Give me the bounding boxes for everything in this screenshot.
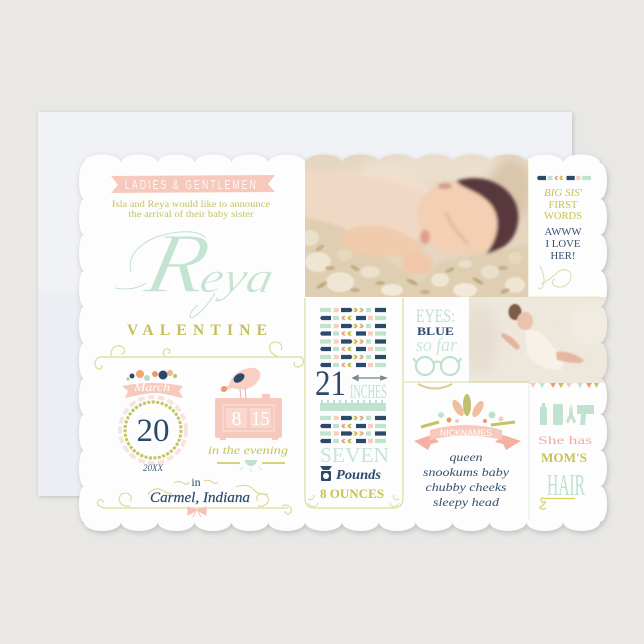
nickname list: sleepy head: [433, 497, 499, 509]
so far: so far: [416, 335, 458, 356]
icon: bird: [220, 368, 260, 398]
name swash: [115, 232, 215, 318]
card with scalloped edge: [79, 154, 607, 531]
quote: I LOVE: [546, 238, 581, 250]
in swirls: [174, 480, 218, 484]
banner: ladies and gentlemen: LADIES & GENTLEMEN: [125, 178, 258, 193]
photo: sleeping newborn on petals: [305, 154, 528, 297]
flourish: [539, 266, 571, 289]
eyes label: EYES:: [416, 306, 455, 327]
panel: date, time and place: [95, 342, 303, 517]
march banner with flowers: [122, 370, 183, 398]
nickname list: queen: [450, 452, 483, 464]
baby surname: VALENTINE: [127, 322, 267, 339]
ounces value: 8 OUNCES: [320, 486, 384, 501]
icon: flip clock 8:15: 15: [252, 408, 270, 430]
pounds unit: Pounds: [336, 468, 382, 483]
horizontal divider: [404, 381, 529, 383]
march banner with flowers: March: [133, 380, 170, 394]
panel: eye colour: [404, 306, 529, 388]
icon: flip clock 8:15: [215, 394, 282, 440]
banner: ladies and gentlemen: [111, 175, 275, 193]
pennant bunting: [530, 383, 599, 388]
arrow pattern top: [320, 308, 386, 367]
dotted panel dividers: [528, 162, 600, 520]
arrow pattern bottom: [320, 416, 386, 443]
first words heading: WORDS: [544, 210, 582, 222]
date wreath: 20: [136, 413, 170, 449]
baby first name: R: [137, 216, 218, 311]
panel: birth announcement heading: [111, 175, 286, 339]
flourish corners: [308, 495, 399, 506]
place name: Carmel, Indiana: [150, 490, 250, 506]
nickname list: snookums baby: [423, 467, 510, 479]
place preposition: in: [191, 475, 201, 489]
panel: nicknames: [414, 394, 521, 509]
hair: HAIR: [547, 467, 585, 502]
announcement text: Isla and Reya would like to announce: [112, 200, 270, 210]
length value: 21: [315, 363, 346, 403]
eye colour value: BLUE: [417, 324, 454, 338]
baby first name: eya: [196, 252, 278, 302]
announcement text: the arrival of their baby sister: [128, 209, 254, 220]
flourish: [540, 498, 575, 509]
icons: hair tools: [540, 403, 594, 425]
year: 20XX: [143, 463, 163, 473]
panel: big sister's first words: [537, 176, 591, 289]
ornament: [418, 384, 452, 388]
quote: HER!: [550, 250, 576, 262]
she has: She has: [538, 433, 592, 447]
panel: length and weight: [305, 298, 403, 508]
panel: she has mom's hair: [530, 383, 599, 509]
envelope behind card: [38, 112, 572, 496]
icon: scale: [320, 466, 332, 481]
mom's: MOM'S: [541, 450, 587, 465]
infographic: birth announcement card on envelope: [38, 112, 610, 535]
date wreath: [120, 397, 186, 463]
first words heading: BIG SIS': [544, 187, 583, 199]
icon: ruler: [320, 400, 386, 411]
icon: arrow: [353, 376, 386, 380]
photo: newborn on white blanket: [462, 296, 610, 383]
quote: AWWW: [544, 226, 582, 238]
icon: flip clock 8:15: 8: [232, 408, 242, 430]
icon: glasses: [413, 357, 461, 375]
nickname list: chubby cheeks: [426, 482, 507, 494]
panel frame: [305, 298, 403, 508]
sun ornament: [217, 460, 285, 472]
nicknames ribbon: NICKNAMES: [440, 428, 492, 438]
time of day: in the evening: [208, 443, 288, 457]
length unit: INCHES: [350, 381, 387, 403]
arrow strip: [537, 176, 591, 180]
pounds value: SEVEN: [320, 443, 389, 467]
flourish frame: [95, 342, 303, 514]
feather and flower bouquet: [421, 394, 515, 427]
first words heading: FIRST: [548, 199, 578, 211]
icon: pink bow: [188, 507, 206, 517]
